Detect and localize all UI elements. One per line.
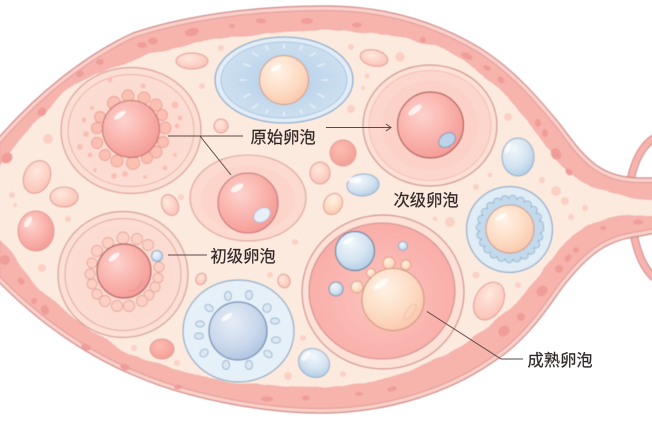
nucleus [436,130,458,150]
granulosa cells [92,90,171,170]
blue cell [152,250,162,262]
granulosa cells [85,232,164,312]
follicle: top-right [363,65,497,186]
oocyte [486,205,534,253]
leader lines [168,136,523,359]
oocyte [97,244,151,298]
follicle: lower blue [183,280,294,382]
label: mature follicle: 成熟卵泡 [528,352,593,370]
label: primordial follicle: 原始卵泡 [250,129,316,147]
oocyte [218,173,278,233]
stroma dots [9,44,588,380]
label: primary follicle: 初级卵泡 [210,248,276,266]
scalloped ring [480,199,540,259]
follicle: right blue [466,186,552,272]
follicle: top-left with granulosa ring [61,68,201,194]
follicle: mature [302,215,464,369]
oocyte [102,100,160,158]
small cells [18,47,511,359]
follicle: top blue [215,37,353,123]
oocyte [209,302,267,360]
follicle: centre [190,155,306,241]
surrounding cells [194,290,280,370]
arrow to secondary follicle [326,124,391,131]
label: secondary follicle: 次级卵泡 [394,192,459,210]
fallopian loop [631,138,652,278]
follicle: lower-left [58,212,188,338]
oocyte [398,92,464,158]
oocyte [362,268,424,330]
antrum bubble [336,232,374,270]
